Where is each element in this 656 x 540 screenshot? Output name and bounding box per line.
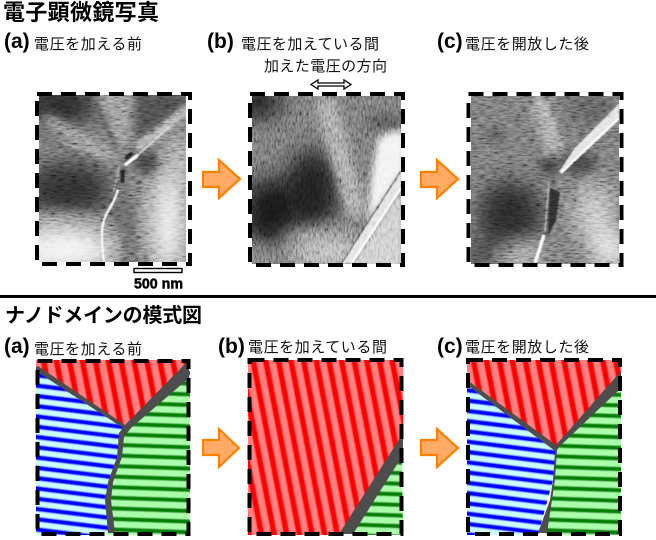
domain: green bbox=[545, 391, 621, 535]
label: top (b) bbox=[207, 30, 379, 53]
schematic (a): before voltage bbox=[36, 359, 190, 536]
micrograph (c): after voltage release bbox=[466, 94, 626, 268]
label: bottom (b): (b) bbox=[218, 335, 245, 358]
micrograph (b): during voltage bbox=[248, 92, 405, 267]
label: top (c): (c) bbox=[437, 30, 463, 53]
scale bar label: 500 nm bbox=[134, 276, 183, 292]
dashed frame bbox=[250, 360, 402, 534]
scale bar bbox=[134, 268, 182, 272]
grain boundaries bbox=[36, 362, 189, 533]
arrow: top a to b bbox=[203, 160, 240, 198]
schematic (c): after voltage release bbox=[466, 358, 622, 536]
grain boundaries bbox=[467, 371, 621, 533]
label: top (a) bbox=[4, 30, 142, 53]
label: bottom (c) bbox=[437, 335, 589, 358]
label: bottom (c): (c) bbox=[437, 335, 463, 358]
arrow: bottom a to b bbox=[203, 429, 239, 467]
label: top (c): 電圧を開放した後 bbox=[465, 36, 589, 53]
label: bottom (a): (a) bbox=[4, 335, 30, 358]
label: top (c) bbox=[437, 30, 589, 53]
arrow: bottom b to c bbox=[421, 429, 458, 467]
grain boundary bbox=[339, 433, 403, 534]
annotation: applied voltage direction: 加えた電圧の方向 bbox=[264, 58, 387, 75]
dashed frame bbox=[468, 360, 620, 534]
label: bottom (a) bbox=[4, 335, 142, 358]
icon: double-headed direction arrow bbox=[311, 80, 351, 89]
domain: green bbox=[108, 370, 190, 535]
arrow: top b to c bbox=[421, 160, 458, 198]
domain: red bbox=[248, 360, 403, 535]
domain: blue bbox=[467, 382, 555, 535]
domain: red bbox=[36, 360, 186, 425]
heading: electron micrographs: 電子顕微鏡写真 bbox=[3, 0, 159, 25]
domain: red bbox=[467, 360, 621, 445]
label: top (b): (b) bbox=[207, 30, 234, 53]
label: bottom (a): 電圧を加える前 bbox=[34, 341, 142, 358]
label: top (a): (a) bbox=[4, 30, 30, 53]
domain: green bbox=[352, 460, 403, 535]
heading: nanodomain schematic: ナノドメインの模式図 bbox=[5, 304, 202, 327]
domain: blue bbox=[36, 373, 123, 535]
label: bottom (b) bbox=[218, 335, 387, 358]
schematic (b): during voltage bbox=[248, 358, 404, 536]
micrograph (a): before voltage bbox=[35, 92, 192, 266]
label: bottom (b): 電圧を加えている間 bbox=[248, 339, 387, 356]
label: top (a): 電圧を加える前 bbox=[34, 36, 142, 53]
dashed frame bbox=[38, 361, 188, 534]
label: bottom (c): 電圧を開放した後 bbox=[465, 339, 589, 356]
label: top (b): 電圧を加えている間 bbox=[241, 36, 379, 53]
section divider bbox=[0, 295, 656, 298]
